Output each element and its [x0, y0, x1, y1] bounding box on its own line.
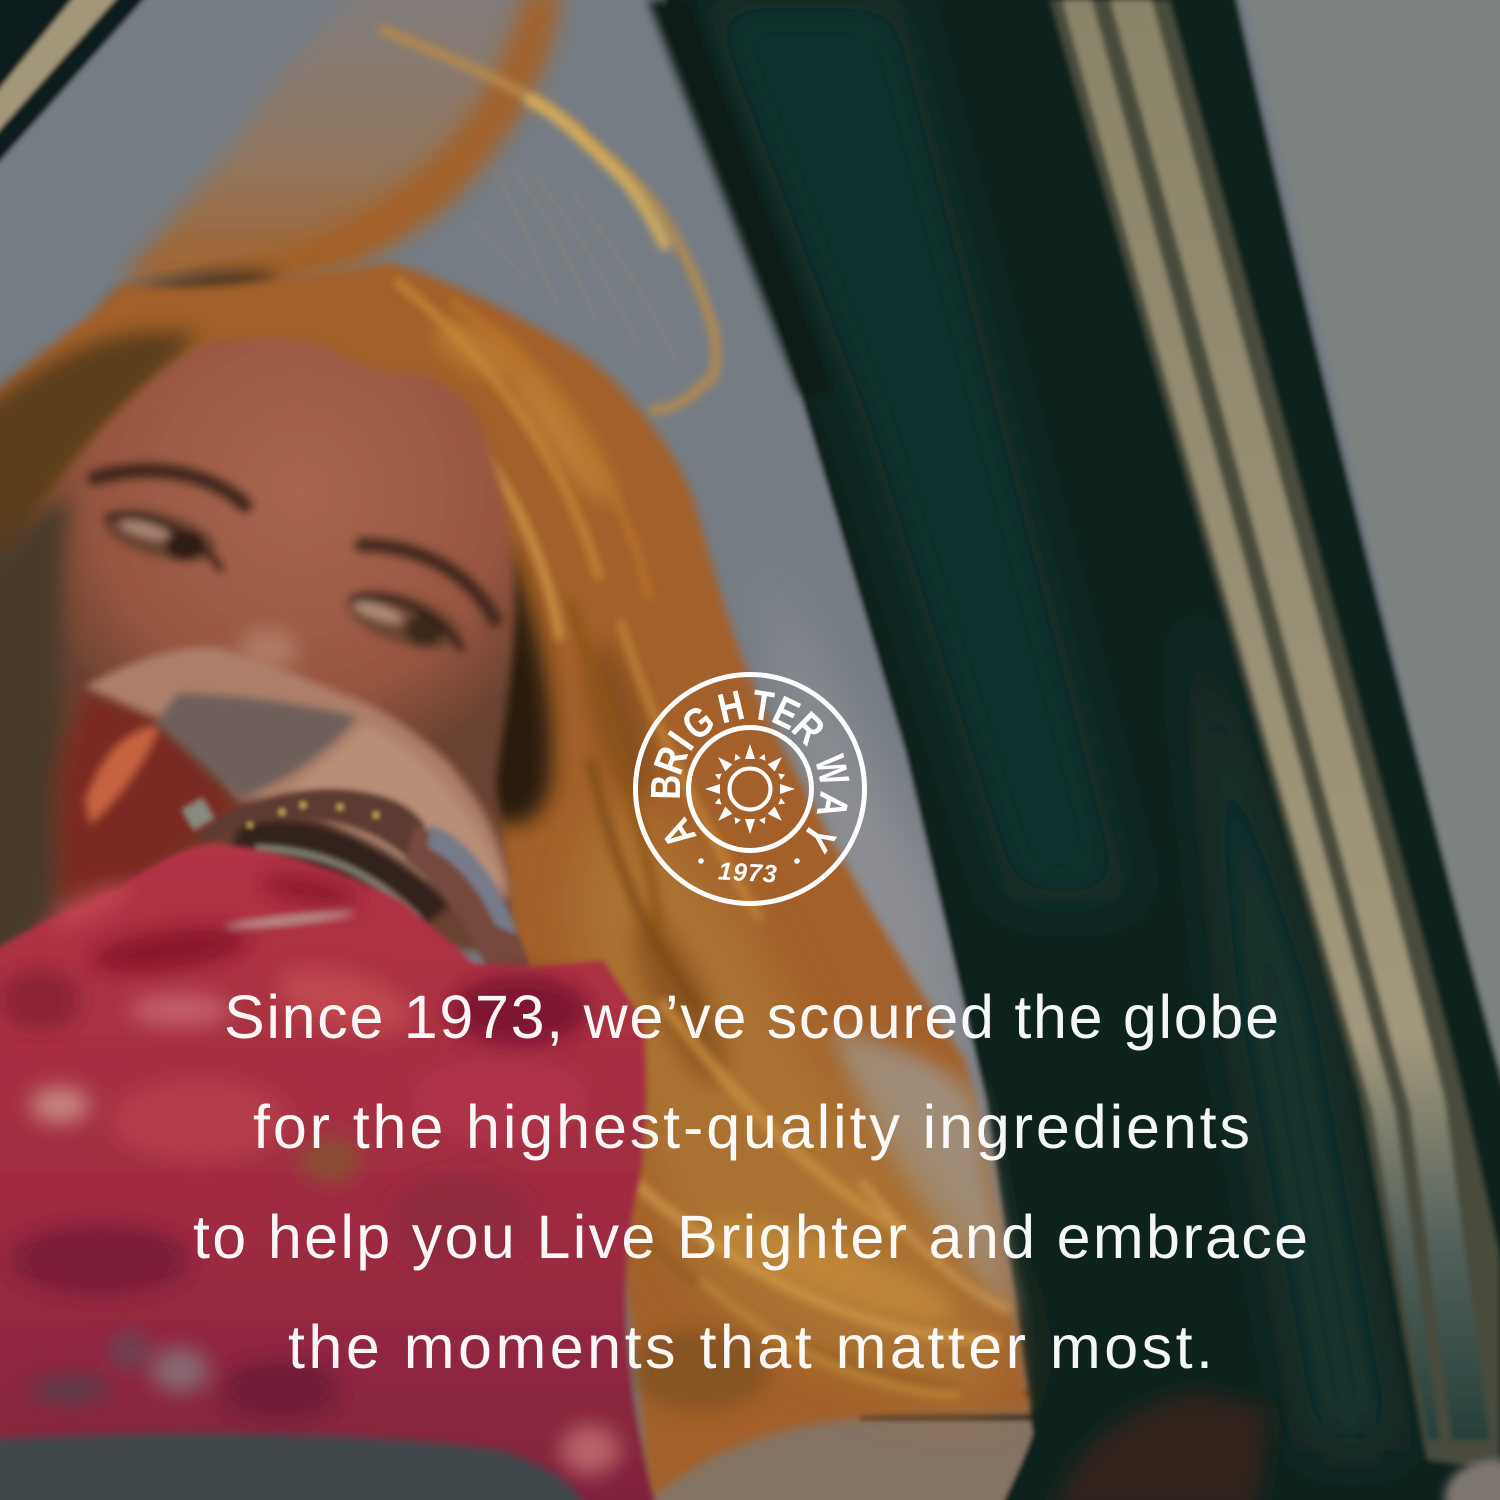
badge outer ring [636, 674, 864, 904]
hand grey shadow [156, 693, 357, 800]
badge inner ring [688, 728, 812, 850]
badge arc text: R [783, 703, 833, 754]
lighter lower window sky [760, 560, 980, 1120]
pillar lower brown patch [1055, 1395, 1270, 1500]
badge arc text: E [766, 687, 807, 740]
bottom car sill [0, 1433, 610, 1500]
trim light stripe 2 [1110, 0, 1490, 1440]
watch body [405, 825, 530, 975]
red shirt [0, 843, 670, 1500]
trim light stripe 1 [1062, 0, 1440, 1440]
pillar lower teal edge [1190, 600, 1400, 1450]
top-left dark car frame [0, 0, 170, 195]
badge arc text: I [659, 724, 703, 758]
hair light patch [570, 800, 1000, 1400]
badge arc text [643, 681, 858, 860]
badge arc text: A [807, 788, 858, 822]
eyes [98, 499, 469, 661]
shirt pattern [0, 868, 620, 1475]
eyebrows [95, 471, 495, 620]
hair dark recess near neck [480, 540, 552, 825]
darker flying hair curl [200, 0, 561, 288]
badge arc text: W [806, 751, 858, 790]
wrist light [290, 725, 505, 885]
thin strands in sky [470, 165, 680, 370]
badge arc text: G [673, 696, 724, 750]
text line 4: the moments that matter most. [288, 1313, 1213, 1381]
badge arc text: A [653, 810, 706, 856]
face and arm skin underlayer [0, 338, 515, 960]
watch face [428, 825, 517, 935]
knuckles and wrist [85, 647, 510, 900]
hollow under band [230, 820, 450, 930]
lower window sill interior [640, 1395, 1060, 1500]
badge arc text: T [749, 681, 777, 731]
bracelet band [200, 789, 425, 860]
outer sky, right side [1232, 0, 1500, 1110]
hair strands [395, 280, 1010, 1395]
sill dark line [850, 1392, 1035, 1418]
translucent flying hair [122, 0, 561, 283]
flying hair blond strand [383, 30, 716, 410]
badge arc text: B [643, 774, 690, 800]
silver inner band [255, 848, 420, 920]
text line 2: for the highest-quality ingredients [253, 1093, 1250, 1161]
hand [57, 647, 510, 905]
text line 3: to help you Live Brighter and embrace [193, 1203, 1308, 1271]
badge arc text: H [714, 682, 749, 733]
body text [193, 983, 1308, 1381]
badge arc text: R [645, 741, 698, 780]
watch clasp [182, 798, 214, 830]
hair mass [0, 263, 1030, 1500]
bracelet studs [247, 802, 380, 828]
flying hair bright highlight [530, 100, 665, 245]
pillar teal highlight [700, 0, 1130, 900]
car door pillar [645, 0, 1500, 1500]
nose tip [238, 628, 298, 672]
text line 1: Since 1973, we’ve scoured the globe [224, 983, 1279, 1051]
watch and bracelet [182, 789, 530, 975]
badge year: 1973 [717, 857, 778, 889]
trim dark band [1166, 0, 1500, 1300]
icon: sun [705, 744, 795, 834]
palm red [57, 687, 240, 905]
shirt pale stripe [225, 908, 355, 932]
badge dots [698, 858, 800, 864]
hair dark shadow top [108, 264, 282, 332]
trim stripes base [1050, 0, 1500, 1470]
badge arc text: Y [793, 814, 844, 860]
hair mottling [425, 309, 961, 1410]
cheek left shadow [0, 500, 70, 960]
head shadow hair left [0, 331, 200, 620]
frame tan stripe [0, 0, 122, 138]
palm glow [85, 725, 160, 825]
pillar black edge strip [648, 0, 835, 393]
beige see-through hair low right [830, 1030, 1015, 1320]
logo: A Brighter Way 1973 badge [636, 674, 864, 904]
bottom right upholstery [1445, 1460, 1500, 1500]
